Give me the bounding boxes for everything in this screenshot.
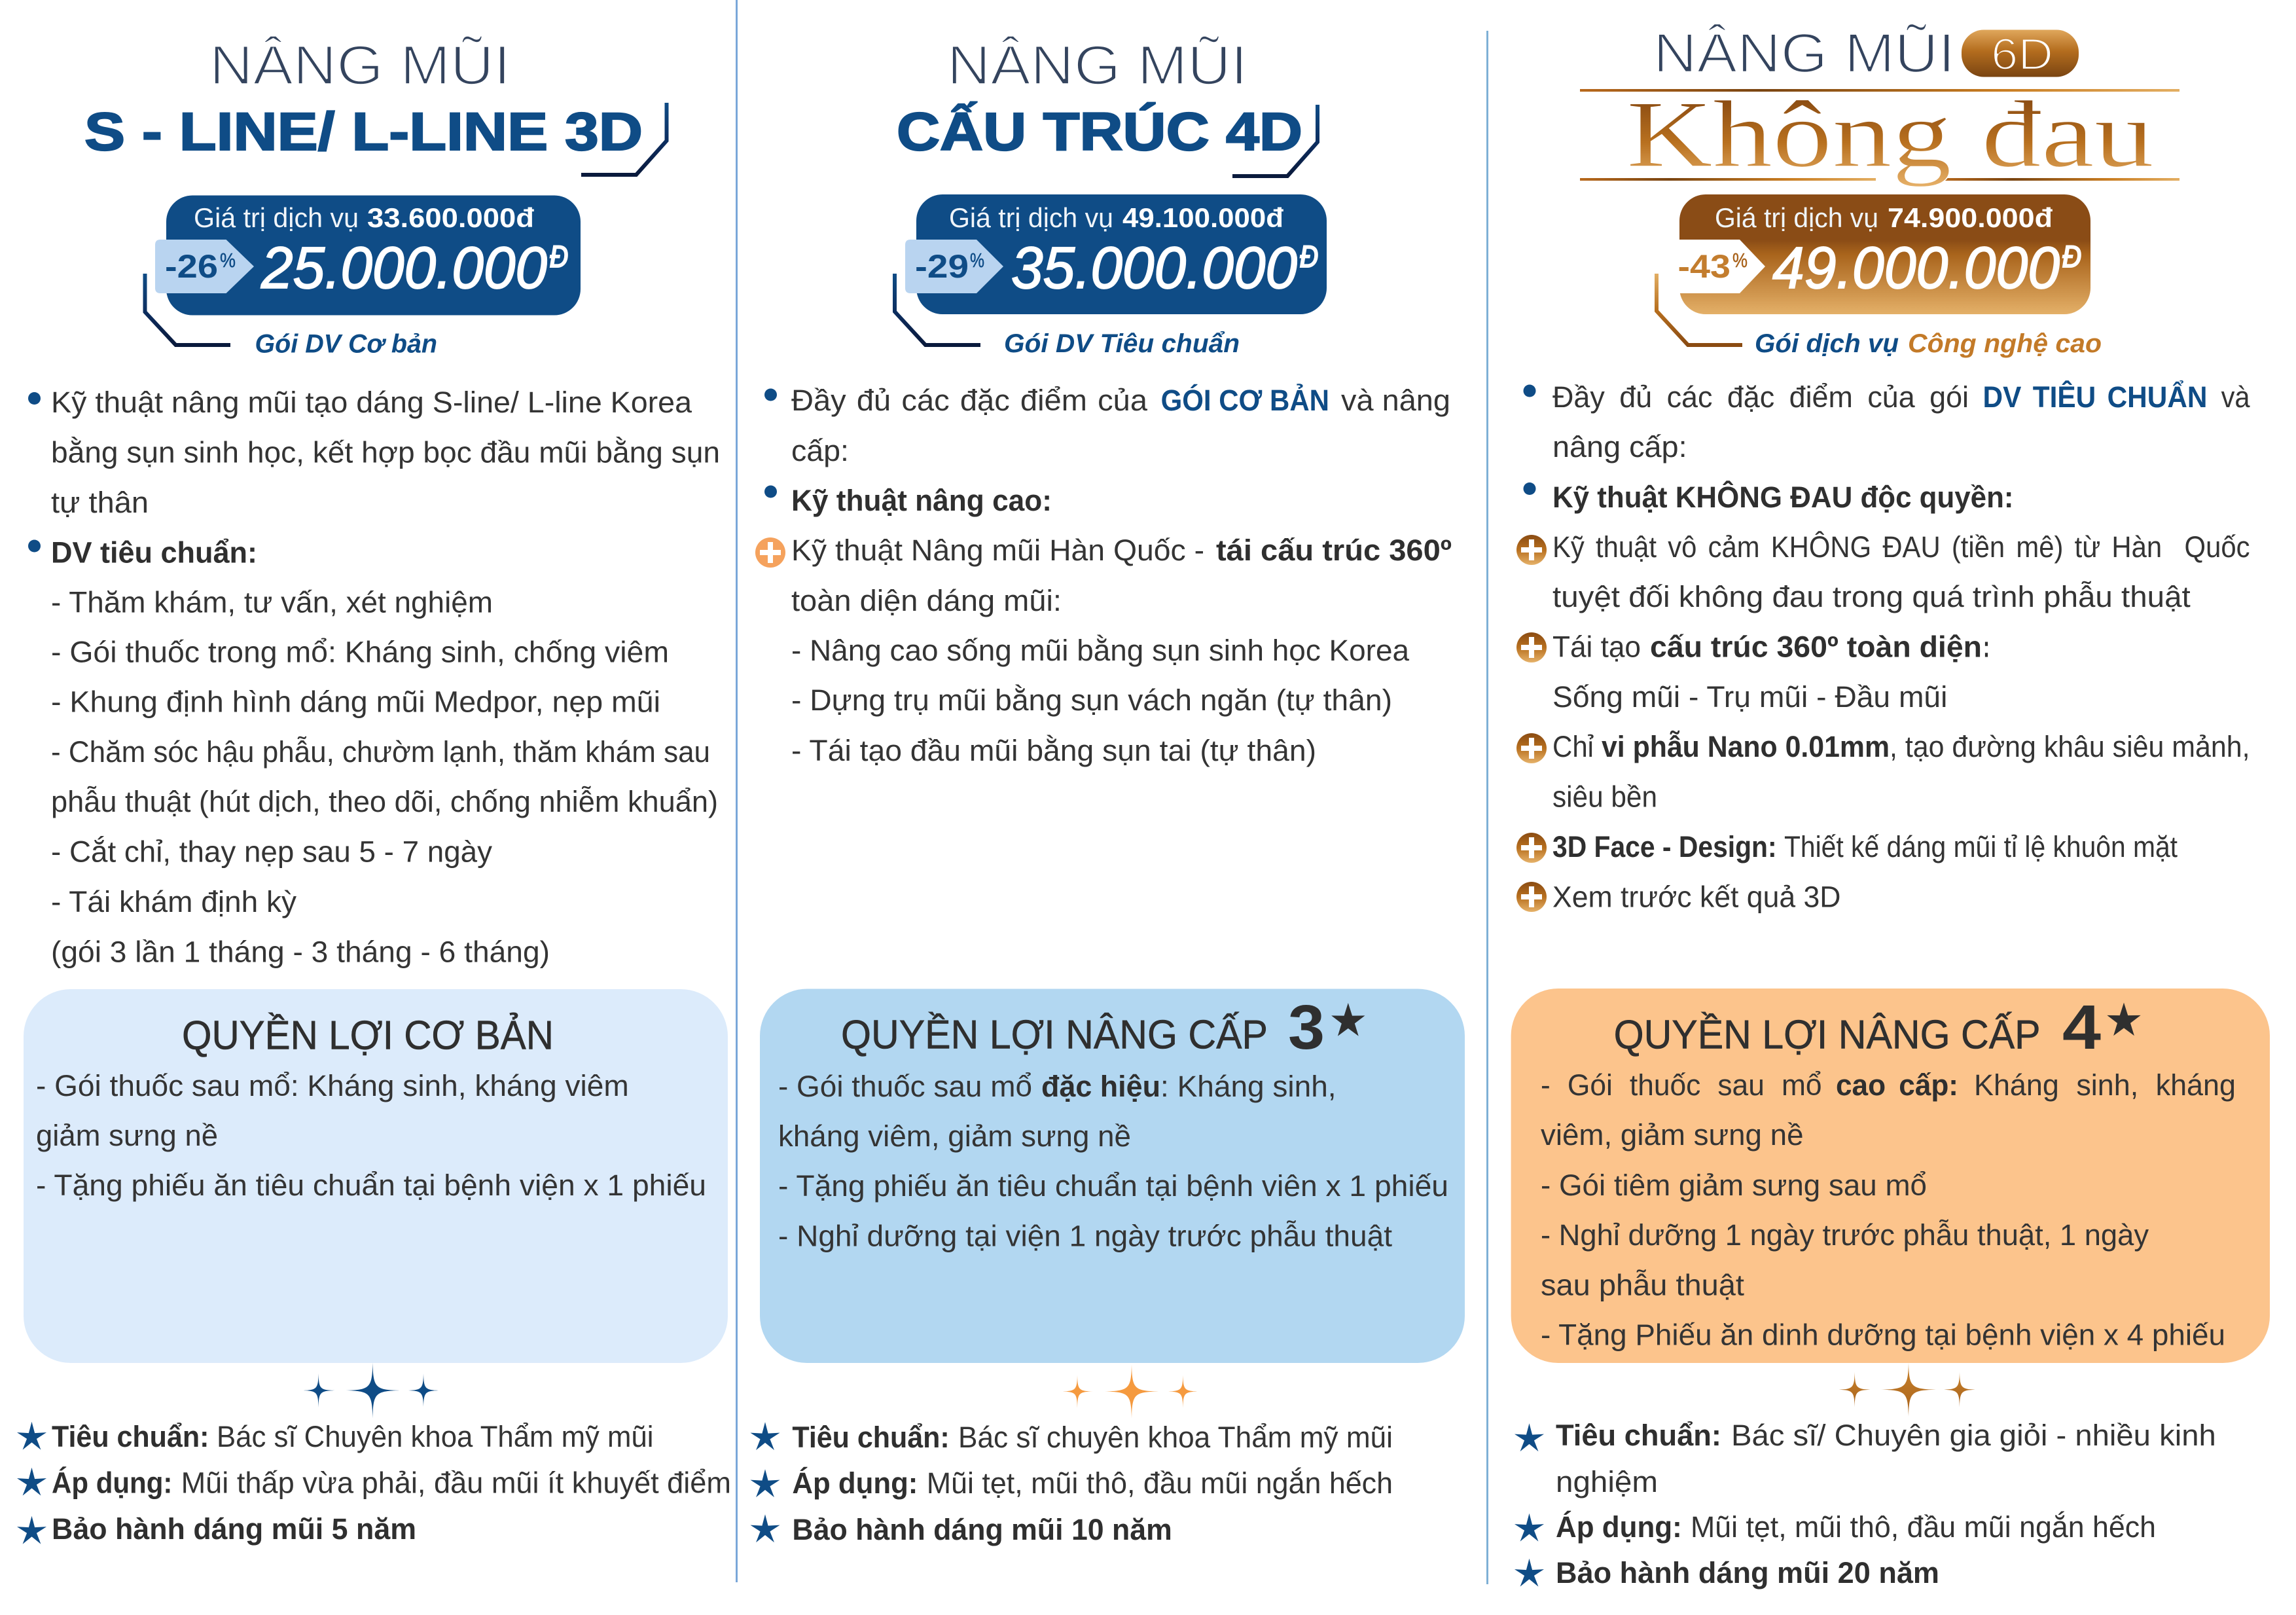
description list: DV TIÊU CHUẨN: [1983, 380, 2207, 414]
description list: , tạo đường khâu siêu mảnh,: [1890, 730, 2250, 763]
description list: - Khung định hình dáng mũi Medpor, nẹp mũi: [51, 685, 660, 719]
description list: toàn diện dáng mũi:: [791, 584, 1062, 617]
heading: S-Line L-Line 3D: S - LINE/ L-LINE 3D: [84, 102, 643, 162]
package name: Gói DV Cơ bản: [255, 330, 437, 359]
description list: [1552, 380, 2250, 914]
price pill: [916, 194, 1327, 314]
description list: GÓI CƠ BẢN: [1161, 384, 1329, 417]
panel: quyền lợi nâng cấp 4 sao: - Nghỉ dưỡng 1 ngày trước phẫu thuật, 1 ngày: [1541, 1218, 2149, 1252]
package name: Công nghệ cao: [1908, 329, 2102, 358]
discount badge: %: [970, 249, 984, 272]
column 2: Cấu trúc 4D: [750, 34, 1465, 1546]
description list: Đầy đủ các đặc điểm của: [791, 384, 1148, 417]
icon: orange plus: [755, 537, 785, 568]
panel: quyền lợi cơ bản: giảm sưng nề: [36, 1119, 218, 1152]
bullet markers: [1524, 385, 1535, 495]
description list: nâng cấp:: [1552, 430, 1687, 463]
panel: quyền lợi nâng cấp 4 sao: QUYỀN LỢI NÂNG CẤP: [1614, 1012, 2041, 1058]
icons: row stars: [1515, 1423, 1544, 1587]
price pill: 33.600.000đ: [367, 202, 534, 233]
criteria list: [52, 1420, 731, 1546]
heading: Nâng mũi: NÂNG MŨI: [209, 34, 511, 96]
title corner bracket: [1232, 105, 1318, 176]
icon: sparkles: [1838, 1363, 1977, 1417]
description list: Tái tạo: [1552, 630, 1641, 664]
description list: [791, 384, 1452, 767]
panel: quyền lợi cơ bản: QUYỀN LỢI CƠ BẢN: [182, 1013, 554, 1058]
discount badge: -29: [915, 248, 969, 285]
price pill: 74.900.000đ: [1888, 202, 2053, 233]
panel: quyền lợi nâng cấp 3 sao: [760, 989, 1465, 1363]
price pill: 25.000.000: [260, 236, 547, 301]
discount badge: [905, 240, 1003, 293]
description list: - Chăm sóc hậu phẫu, chườm lạnh, thăm khám sau: [51, 735, 710, 769]
description list: - Tái khám định kỳ: [51, 885, 297, 918]
divider between column 2 and 3: [1486, 31, 1488, 1584]
description list: cấu trúc 360º toàn diện: [1650, 630, 1982, 664]
description list: Kỹ thuật KHÔNG ĐAU độc quyền:: [1552, 481, 2013, 514]
heading: Không đau: Không đau: [1626, 81, 2154, 187]
price pill: Đ: [2062, 238, 2082, 275]
panel: quyền lợi nâng cấp 3 sao: 3: [1288, 992, 1325, 1062]
icon: sparkles: [1062, 1364, 1198, 1418]
criteria list: Tiêu chuẩn:: [792, 1421, 950, 1454]
panel: quyền lợi nâng cấp 3 sao: - Gói thuốc sau mổ: [778, 1070, 1032, 1103]
panel: quyền lợi cơ bản: [24, 989, 728, 1363]
panel: quyền lợi nâng cấp 4 sao: - Gói thuốc sau mổ: [1541, 1068, 1822, 1102]
description list: Kỹ thuật nâng cao:: [791, 484, 1052, 517]
criteria list: Bác sĩ/ Chuyên gia giỏi - nhiều kinh: [1731, 1419, 2216, 1452]
description list: phẫu thuật (hút dịch, theo dõi, chống nhiễm khuẩn): [51, 785, 718, 818]
heading: Nâng mũi: NÂNG MŨI: [947, 34, 1247, 96]
criteria list: Bác sĩ chuyên khoa Thẩm mỹ mũi: [958, 1421, 1393, 1454]
discount badge: %: [1732, 249, 1748, 272]
description list: tuyệt đối không đau trong quá trình phẫu thuật: [1552, 580, 2191, 613]
panel: quyền lợi nâng cấp 4 sao: sau phẫu thuật: [1541, 1269, 1745, 1302]
description list: Chỉ: [1552, 730, 1594, 763]
description list: 3D Face - Design:: [1552, 830, 1777, 863]
badge: 6D: [1962, 29, 2079, 79]
price pill: [1679, 194, 2090, 314]
criteria list: Bảo hành dáng mũi 10 năm: [792, 1513, 1172, 1546]
description list: Kỹ thuật Nâng mũi Hàn Quốc -: [791, 534, 1204, 567]
description list: tự thân: [51, 486, 149, 519]
price pill: Giá trị dịch vụ: [1715, 202, 1878, 233]
criteria list: Tiêu chuẩn:: [52, 1420, 209, 1453]
panel: quyền lợi nâng cấp 4 sao: [1511, 989, 2270, 1363]
description list: :: [1983, 630, 1990, 664]
description list: - Cắt chỉ, thay nẹp sau 5 - 7 ngày: [51, 835, 493, 868]
price pill: Giá trị dịch vụ: [949, 202, 1113, 233]
description list: và: [2221, 380, 2250, 414]
description list: [51, 386, 720, 969]
discount badge: -26: [165, 248, 218, 285]
description list: cấp:: [791, 434, 849, 467]
heading: Nâng mũi: NÂNG MŨI: [1653, 22, 1955, 84]
title corner bracket: [581, 103, 666, 175]
panel: quyền lợi nâng cấp 3 sao: - Nghỉ dưỡng tại viện 1 ngày trước phẫu thuật: [778, 1220, 1392, 1253]
column 3: 6D Không đau: [1511, 22, 2270, 1589]
description list: Kỹ thuật vô cảm KHÔNG ĐAU (tiền mê) từ Hàn Quốc: [1552, 530, 2250, 564]
package name: Gói dịch vụ: [1755, 329, 1899, 358]
price pill: [166, 195, 581, 316]
criteria list: Bảo hành dáng mũi 5 năm: [52, 1512, 416, 1546]
criteria list: Bác sĩ Chuyên khoa Thẩm mỹ mũi: [217, 1420, 653, 1453]
panel: quyền lợi cơ bản: - Tặng phiếu ăn tiêu chuẩn tại bệnh viện x 1 phiếu: [36, 1169, 706, 1202]
discount badge: [1673, 240, 1765, 293]
description list: Đầy đủ các đặc điểm của gói: [1552, 380, 1969, 414]
divider between column 1 and 2: [736, 0, 738, 1582]
panel: quyền lợi cơ bản: - Gói thuốc sau mổ: Kháng sinh, kháng viêm: [36, 1069, 629, 1102]
price pill: 35.000.000: [1011, 236, 1297, 301]
price corner bracket: [895, 274, 980, 345]
criteria list: Mũi thấp vừa phải, đầu mũi ít khuyết điểm: [181, 1466, 731, 1500]
gold rules: [1580, 89, 2179, 181]
icons: row stars: [17, 1422, 46, 1544]
description list: - Dựng trụ mũi bằng sụn vách ngăn (tự thân): [791, 683, 1392, 717]
criteria list: nghiệm: [1556, 1465, 1658, 1498]
discount badge: [155, 240, 254, 293]
criteria list: Áp dụng:: [1556, 1510, 1682, 1544]
price pill: 49.100.000đ: [1122, 202, 1283, 233]
description list: Sống mũi - Trụ mũi - Đầu mũi: [1552, 680, 1947, 714]
description list: - Nâng cao sống mũi bằng sụn sinh học Korea: [791, 634, 1410, 667]
column 1: S-line L-line 3D: [17, 34, 731, 1546]
description list: Thiết kế dáng mũi tỉ lệ khuôn mặt: [1784, 830, 2178, 863]
badge: 6D: 6D: [1991, 29, 2053, 79]
criteria list: Mũi tẹt, mũi thô, đầu mũi ngắn hếch: [927, 1466, 1393, 1500]
package name: Gói DV Tiêu chuẩn: [1004, 329, 1240, 358]
panel: quyền lợi nâng cấp 4 sao: 4: [2062, 992, 2101, 1062]
description list: - Tái tạo đầu mũi bằng sụn tai (tự thân): [791, 734, 1316, 767]
price pill: Giá trị dịch vụ: [194, 202, 359, 233]
panel: quyền lợi nâng cấp 3 sao: QUYỀN LỢI NÂNG CẤP: [841, 1012, 1268, 1058]
price corner bracket: [1657, 274, 1742, 345]
panel: quyền lợi nâng cấp 3 sao: đặc hiệu: [1041, 1070, 1160, 1103]
description list: - Thăm khám, tư vấn, xét nghiệm: [51, 586, 493, 619]
panel: quyền lợi nâng cấp 4 sao: - Gói tiêm giảm sưng sau mổ: [1541, 1169, 1927, 1202]
bullet markers: [764, 389, 777, 498]
criteria list: [792, 1421, 1393, 1546]
description list: tái cấu trúc 360º: [1216, 534, 1452, 567]
description list: (gói 3 lần 1 tháng - 3 tháng - 6 tháng): [51, 935, 550, 969]
description list: và nâng: [1341, 384, 1450, 417]
criteria list: Tiêu chuẩn:: [1556, 1419, 1721, 1452]
panel: quyền lợi nâng cấp 4 sao: - Tặng Phiếu ăn dinh dưỡng tại bệnh viện x 4 phiếu: [1541, 1318, 2225, 1351]
price corner bracket: [145, 274, 230, 345]
criteria list: Mũi tẹt, mũi thô, đầu mũi ngắn hếch: [1691, 1510, 2156, 1544]
panel: quyền lợi nâng cấp 3 sao: : Kháng sinh,: [1160, 1070, 1336, 1103]
price pill: 49.000.000: [1772, 236, 2060, 301]
criteria list: Bảo hành dáng mũi 20 năm: [1556, 1556, 1939, 1589]
price pill: Đ: [1299, 238, 1319, 275]
panel: quyền lợi nâng cấp 3 sao: kháng viêm, giảm sưng nề: [778, 1119, 1131, 1153]
panel: quyền lợi nâng cấp 4 sao: viêm, giảm sưng nề: [1541, 1118, 1804, 1152]
icons: row stars: [750, 1422, 780, 1542]
description list: bằng sụn sinh học, kết hợp bọc đầu mũi bằng sụn: [51, 435, 720, 469]
description list: Xem trước kết quả 3D: [1552, 880, 1840, 914]
criteria list: [1556, 1419, 2216, 1589]
heading: Cấu trúc 4D: CẤU TRÚC 4D: [897, 102, 1302, 162]
panel: quyền lợi nâng cấp 4 sao: cao cấp:: [1836, 1068, 1958, 1102]
description list: - Gói thuốc trong mổ: Kháng sinh, chống viêm: [51, 635, 669, 669]
description list: DV tiêu chuẩn:: [51, 535, 257, 569]
panel: quyền lợi nâng cấp 3 sao: - Tặng phiếu ăn tiêu chuẩn tại bệnh viên x 1 phiếu: [778, 1169, 1448, 1203]
discount badge: -43: [1678, 248, 1731, 285]
criteria list: Áp dụng:: [792, 1466, 918, 1500]
discount badge: %: [220, 249, 236, 272]
price pill: Đ: [549, 238, 569, 275]
panel: quyền lợi nâng cấp 4 sao: Kháng sinh, kháng: [1974, 1068, 2236, 1102]
criteria list: Áp dụng:: [52, 1466, 172, 1500]
bullet markers: [28, 392, 41, 553]
icons: gold plus: [1516, 535, 1547, 912]
icon: sparkles: [302, 1363, 440, 1418]
description list: siêu bền: [1552, 780, 1657, 813]
description list: Kỹ thuật nâng mũi tạo dáng S-line/ L-line Korea: [51, 386, 692, 419]
description list: vi phẫu Nano 0.01mm: [1602, 730, 1890, 763]
package name: [1755, 329, 2102, 358]
